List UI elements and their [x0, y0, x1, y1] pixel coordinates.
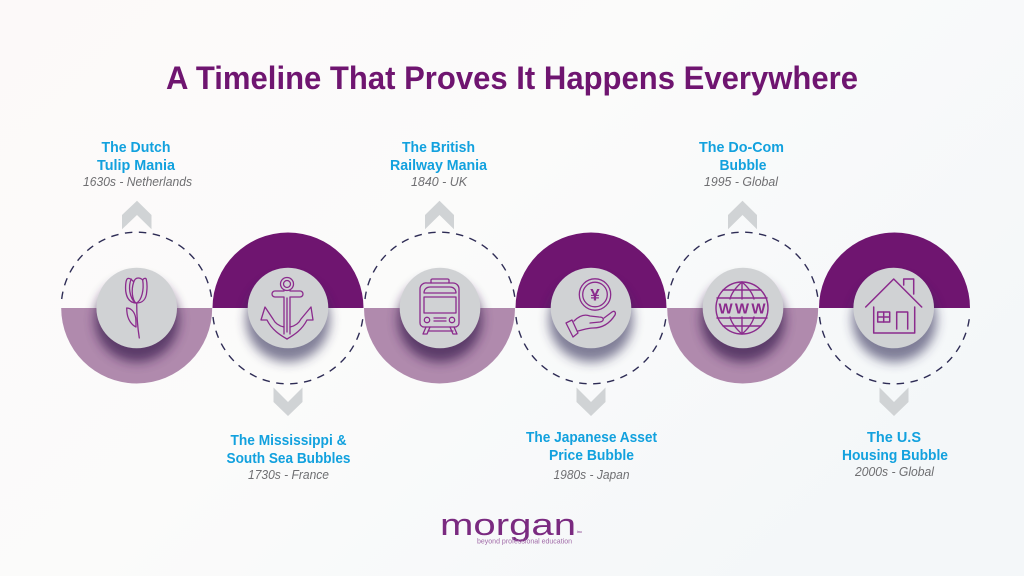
label: U.S Housing Bubble	[842, 429, 948, 479]
dashed upper half circle	[62, 232, 212, 299]
label: Mississippi & South Sea Bubbles: South Sea Bubbles	[226, 450, 350, 467]
icon: house	[866, 279, 922, 333]
logo: Morgan: inc	[577, 529, 582, 534]
light purple lower half circle	[364, 308, 515, 384]
label: Dutch Tulip Mania	[83, 139, 192, 189]
icon disc	[853, 268, 934, 348]
icon: hand holding yen coin	[566, 279, 615, 337]
arrow: up chevron	[728, 201, 757, 229]
label: Dutch Tulip Mania: 1630s - Netherlands	[83, 175, 192, 189]
icon shadow	[398, 278, 482, 362]
label: Mississippi & South Sea Bubbles: The Mississippi &	[230, 432, 347, 449]
label: U.S Housing Bubble: 2000s - Global	[854, 465, 935, 479]
label: U.S Housing Bubble: The U.S	[867, 429, 921, 446]
label: Mississippi & South Sea Bubbles	[226, 432, 350, 482]
step 2: Mississippi & South Sea Bubbles	[212, 232, 364, 482]
step 6: U.S Housing Bubble	[819, 232, 970, 479]
icon: anchor	[261, 278, 313, 339]
step 5: Do-Com Bubble	[667, 139, 818, 384]
icon disc	[703, 268, 783, 348]
arrow: down chevron	[274, 388, 302, 416]
logo: Morgan: morgan	[440, 507, 576, 542]
dark purple upper half circle	[212, 232, 364, 308]
icon disc	[248, 268, 328, 348]
icon shadow	[95, 278, 179, 362]
label: Do-Com Bubble: 1995 - Global	[704, 175, 779, 189]
label: U.S Housing Bubble: Housing Bubble	[842, 447, 948, 464]
icon: www globe: WWW	[718, 300, 766, 318]
arrow: up chevron	[425, 201, 454, 229]
dashed lower half circle	[213, 317, 363, 384]
icon shadow	[701, 278, 785, 362]
icon: train	[420, 279, 459, 334]
label: Dutch Tulip Mania: The Dutch	[102, 139, 170, 156]
dashed lower half circle	[820, 317, 970, 384]
light purple lower half circle	[667, 308, 818, 384]
logo: Morgan: beyond professional education	[477, 536, 572, 546]
icon: hand holding yen coin: ¥	[590, 286, 600, 304]
icon disc	[551, 268, 631, 348]
label: Japanese Asset Price Bubble: The Japanese Asset	[526, 429, 657, 446]
label: Do-Com Bubble	[699, 139, 784, 189]
label: British Railway Mania: Railway Mania	[390, 157, 488, 174]
icon disc	[96, 268, 177, 348]
dashed upper half circle	[365, 232, 515, 299]
label: Japanese Asset Price Bubble: 1980s - Japan	[554, 468, 630, 482]
label: Do-Com Bubble: The Do-Com	[699, 139, 784, 156]
title: A Timeline That Proves It Happens Everywhere	[166, 60, 858, 96]
step 3: British Railway Mania	[364, 139, 515, 384]
light purple lower half circle	[61, 308, 212, 384]
label: Dutch Tulip Mania: Tulip Mania	[97, 157, 176, 174]
icon shadow	[246, 278, 330, 362]
arrow: up chevron	[122, 201, 152, 229]
icon shadow	[549, 278, 633, 362]
dark purple upper half circle	[819, 232, 970, 308]
label: Do-Com Bubble: Bubble	[720, 157, 766, 174]
arrow: down chevron	[880, 388, 908, 416]
icon shadow	[852, 278, 936, 362]
label: Japanese Asset Price Bubble: Price Bubble	[549, 447, 634, 464]
label: British Railway Mania: 1840 - UK	[411, 175, 468, 189]
label: Japanese Asset Price Bubble	[526, 429, 657, 482]
logo: Morgan	[440, 507, 582, 546]
label: British Railway Mania	[390, 139, 488, 189]
dashed upper half circle	[668, 232, 818, 299]
step 1: Dutch Tulip Mania	[61, 139, 212, 384]
label: Mississippi & South Sea Bubbles: 1730s - France	[248, 468, 329, 482]
dashed lower half circle	[516, 317, 666, 384]
icon: www globe	[716, 282, 768, 334]
icon disc	[400, 268, 480, 348]
step 4: Japanese Asset Price Bubble	[516, 233, 666, 482]
dark purple upper half circle	[516, 233, 666, 308]
icon: tulip	[126, 278, 147, 338]
arrow: down chevron	[576, 388, 606, 416]
label: British Railway Mania: The British	[402, 139, 475, 156]
